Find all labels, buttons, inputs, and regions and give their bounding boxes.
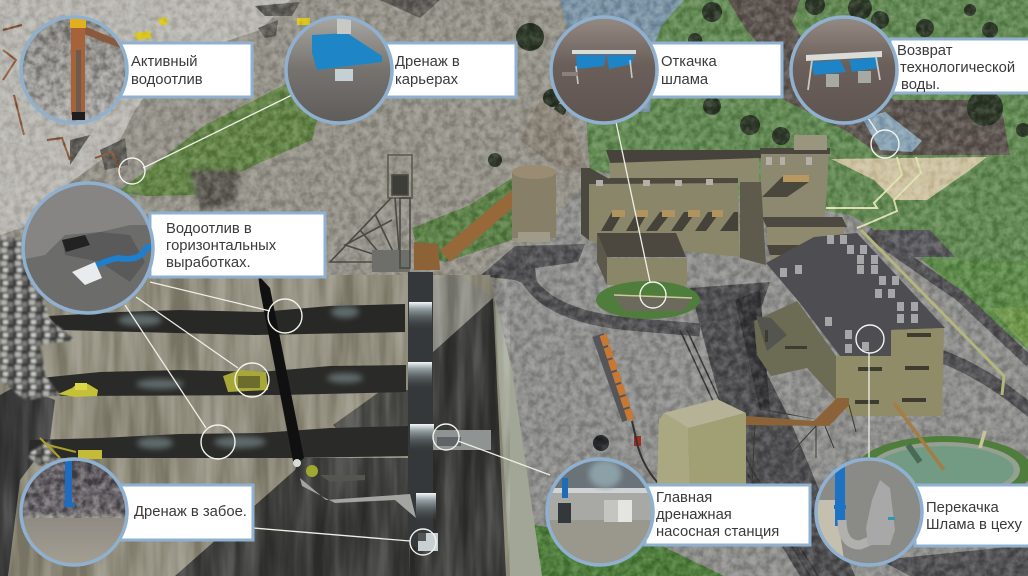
rock streak overlay — [0, 275, 510, 576]
settling pond — [862, 112, 922, 152]
vents — [780, 235, 918, 353]
ore bin and haulage — [293, 459, 416, 518]
road pad by silo — [480, 244, 585, 290]
circle frame — [791, 17, 897, 123]
label text: Активный — [131, 54, 198, 70]
left dark edge — [0, 385, 55, 576]
label text: технологической — [900, 60, 1015, 76]
rubble heaps — [0, 235, 75, 400]
wooden conveyor gallery — [746, 398, 856, 485]
callout: active dewatering — [20, 16, 252, 124]
bright rock terraces upper left — [0, 0, 290, 235]
dark yard pad — [871, 230, 955, 257]
label text: горизонтальных — [166, 238, 277, 254]
lake — [515, 0, 684, 112]
haze in tunnels — [118, 306, 363, 449]
plant access roads — [520, 232, 1028, 412]
upper light hill edge — [520, 100, 590, 175]
callout: main drainage pump station — [546, 458, 810, 566]
annex roof — [762, 217, 847, 228]
icon: pump in tunnel — [24, 185, 152, 312]
front block wall — [607, 258, 687, 285]
pipes on terraces — [3, 25, 120, 170]
icon: twin blue pumps — [550, 16, 658, 124]
hotspot markers — [119, 130, 899, 555]
upper wall — [609, 158, 759, 182]
ledge roof — [590, 178, 738, 184]
main processing plant building — [581, 135, 847, 285]
round silo and inclined conveyor — [414, 165, 556, 270]
small tree — [593, 435, 609, 451]
callout: drainage in open pits — [286, 16, 516, 124]
icon: underground pump chamber — [546, 458, 654, 566]
upper roof — [606, 150, 761, 165]
underground mine cross-section — [0, 235, 542, 576]
label text: Дренаж в — [395, 54, 460, 70]
rail tracks — [680, 330, 818, 576]
callout: process water return — [790, 16, 1028, 124]
tunnel level 2 — [40, 365, 406, 396]
icon: blue pipe in rock — [20, 458, 128, 566]
tunnel level 1 — [48, 304, 405, 335]
canopies — [612, 210, 723, 217]
left wall — [754, 301, 836, 400]
tunnel level 3 — [28, 426, 408, 458]
shaft station lights — [408, 302, 436, 523]
ore train — [598, 335, 660, 485]
callout: dewatering in horizontal workings — [20, 183, 325, 313]
rocky hillside — [0, 0, 590, 290]
label text: выработках. — [166, 255, 251, 271]
inclined shaft — [258, 275, 304, 466]
headframe and shaft tower — [330, 155, 412, 272]
right green terrain detail — [488, 0, 1028, 167]
bottom grass — [534, 525, 724, 576]
dark rock patches — [70, 0, 440, 170]
shadowed right wall — [433, 298, 506, 576]
light wedge wall — [433, 275, 493, 352]
label text: воды. — [901, 77, 940, 93]
callout: slurry transfer in workshop — [816, 458, 1028, 566]
tower shadow — [762, 175, 809, 197]
upper green valley — [560, 0, 1028, 345]
circle frame — [21, 459, 127, 565]
silo body — [512, 172, 556, 238]
circle frame — [286, 17, 392, 123]
icon: twin pumps with floats — [790, 16, 898, 124]
sludge pond with grass — [596, 281, 700, 319]
process water pipelines — [826, 157, 921, 228]
thickener tank — [856, 403, 1028, 504]
lit wall — [836, 328, 944, 416]
circle frame — [547, 459, 653, 565]
label text: Откачка — [661, 54, 717, 70]
tower roof — [760, 148, 830, 154]
label text: Возврат — [897, 43, 952, 59]
label text: Шлама в цеху — [926, 517, 1023, 533]
diagonal shadow middle — [333, 390, 408, 432]
yellow dump truck — [223, 370, 268, 392]
tower body — [761, 153, 829, 217]
green patch near headframe — [412, 178, 512, 262]
conveyor gallery — [440, 190, 518, 262]
shadows of window canopies — [601, 212, 738, 231]
label text: Перекачка — [926, 500, 999, 516]
tailings dam — [831, 157, 987, 200]
pale outer pit face — [460, 275, 542, 576]
circle frame — [21, 17, 127, 123]
conveyor head house — [414, 242, 440, 270]
sump pump chamber — [418, 533, 438, 551]
icon: borehole pump photo — [20, 16, 128, 124]
circle frame — [551, 17, 657, 123]
label text: водоотлив — [131, 72, 203, 88]
callout: face drainage — [20, 458, 253, 566]
label text: Главная — [656, 490, 712, 506]
brown road — [728, 0, 1010, 155]
shadow diagonal lower — [175, 458, 410, 576]
label text: дренажная — [656, 507, 732, 523]
label text: насосная станция — [656, 524, 779, 540]
leader lines — [125, 95, 878, 541]
label text: карьерах — [395, 72, 459, 88]
yellow loader — [58, 383, 98, 397]
trucks in open pit — [134, 17, 310, 40]
long pipeline on right — [861, 230, 1004, 395]
vertical shaft — [408, 272, 433, 547]
icon: blue drainage pump — [286, 16, 394, 124]
callout: slurry pumping — [550, 16, 782, 124]
windows — [765, 330, 931, 404]
crushed-ore silo building — [657, 399, 746, 486]
annex step roof — [767, 245, 815, 255]
annex wall — [767, 227, 844, 245]
label text: Дренаж в забое. — [134, 504, 247, 520]
label text: Водоотлив в — [166, 221, 252, 237]
label text: шлама — [661, 72, 709, 88]
side dark wall — [581, 168, 611, 241]
rock wall — [0, 275, 510, 576]
lower wall — [589, 180, 740, 257]
tower top block — [794, 135, 827, 150]
shadow lane — [735, 290, 820, 420]
yellow drill rig — [40, 438, 102, 459]
grass right lower — [920, 258, 1028, 350]
circle frame — [816, 459, 922, 565]
roof vents — [596, 157, 812, 186]
main yard road — [690, 282, 855, 576]
lower dark side — [740, 182, 766, 265]
icon: submersible slurry pump — [816, 458, 924, 566]
side wing roof — [756, 316, 787, 351]
grey pit slope lines — [190, 170, 240, 210]
circle frame — [23, 183, 153, 313]
process building with roof vents — [754, 233, 945, 416]
main pump station tunnel — [433, 430, 491, 450]
green slope — [118, 82, 320, 196]
roof — [766, 233, 945, 356]
front block roof — [597, 233, 686, 257]
